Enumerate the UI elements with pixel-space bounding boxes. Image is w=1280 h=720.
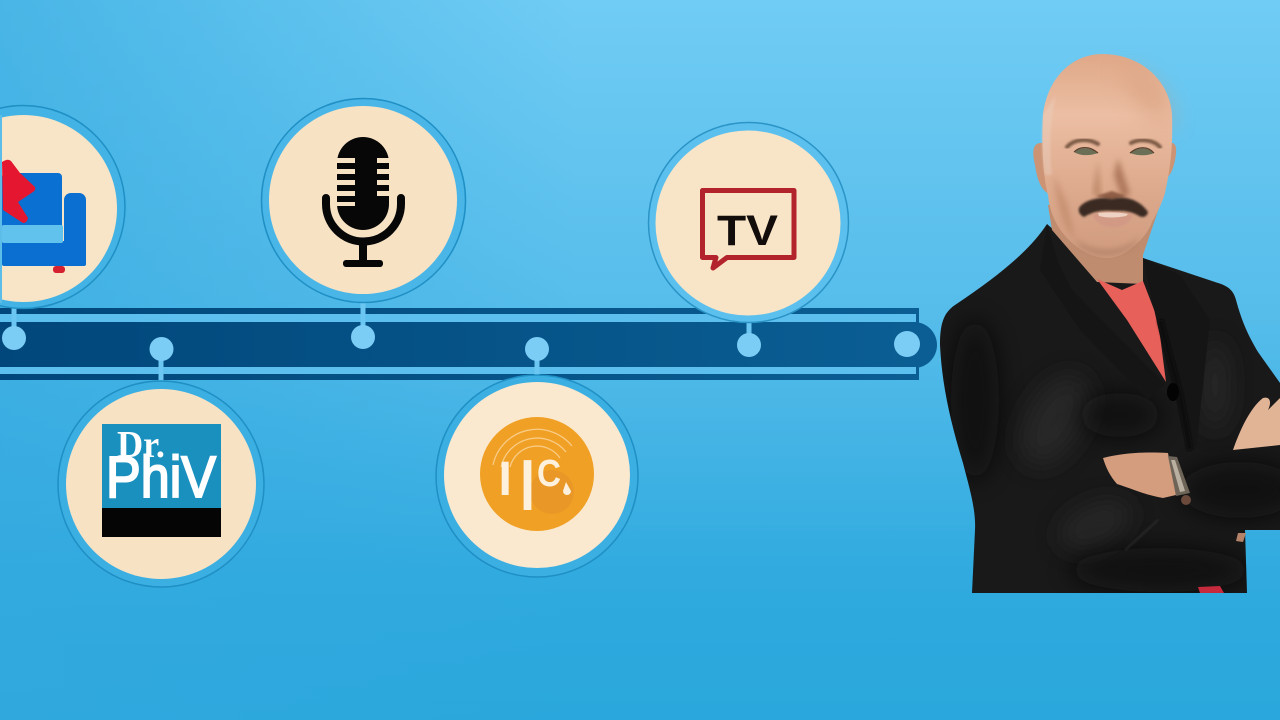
connector dot 2 [150,337,174,383]
connector dot 3 [351,300,375,349]
logo box [102,424,221,537]
logo box: PhiV [106,445,216,510]
icon: TV speech bubble [702,190,794,268]
mouth [1092,212,1133,228]
shirt [1097,279,1166,382]
hidden fingertip [1236,533,1246,542]
eyes [1074,148,1154,155]
icon: TV speech bubble: TV [717,207,778,255]
icon: microphone [326,137,401,267]
lapels [1040,224,1210,450]
neck [1048,205,1160,284]
eyebrows [1067,140,1160,147]
icon: sofa with red flag [2,160,86,273]
forearm skin and watch [1103,453,1191,505]
moustache [1079,198,1148,217]
face shading [1042,70,1172,255]
logo box: Dr. [117,424,165,466]
circle: Dr. Phil logo [58,381,264,587]
ears [1033,143,1176,194]
jacket [940,224,1280,593]
end dot of timeline [894,331,920,357]
circle: TV [648,122,848,322]
circle: microphone [262,98,466,302]
connector dot 1 [2,304,26,350]
connector dot 5 [737,320,761,357]
connector dot 4 [525,337,549,379]
logo: orange disc [480,417,594,531]
placket and button [1160,320,1190,450]
logo: orange disc: I [520,446,535,526]
circle: sofa [0,106,125,308]
logo: orange disc: I [498,453,512,506]
jacket shading [951,320,1280,592]
circle: orange logo [436,375,638,577]
logo: orange disc: C [537,453,561,495]
head [1042,54,1172,258]
person portrait [940,54,1280,593]
crossed hand [1233,398,1280,450]
shirt hem [1198,586,1224,593]
timeline bar [0,308,937,380]
